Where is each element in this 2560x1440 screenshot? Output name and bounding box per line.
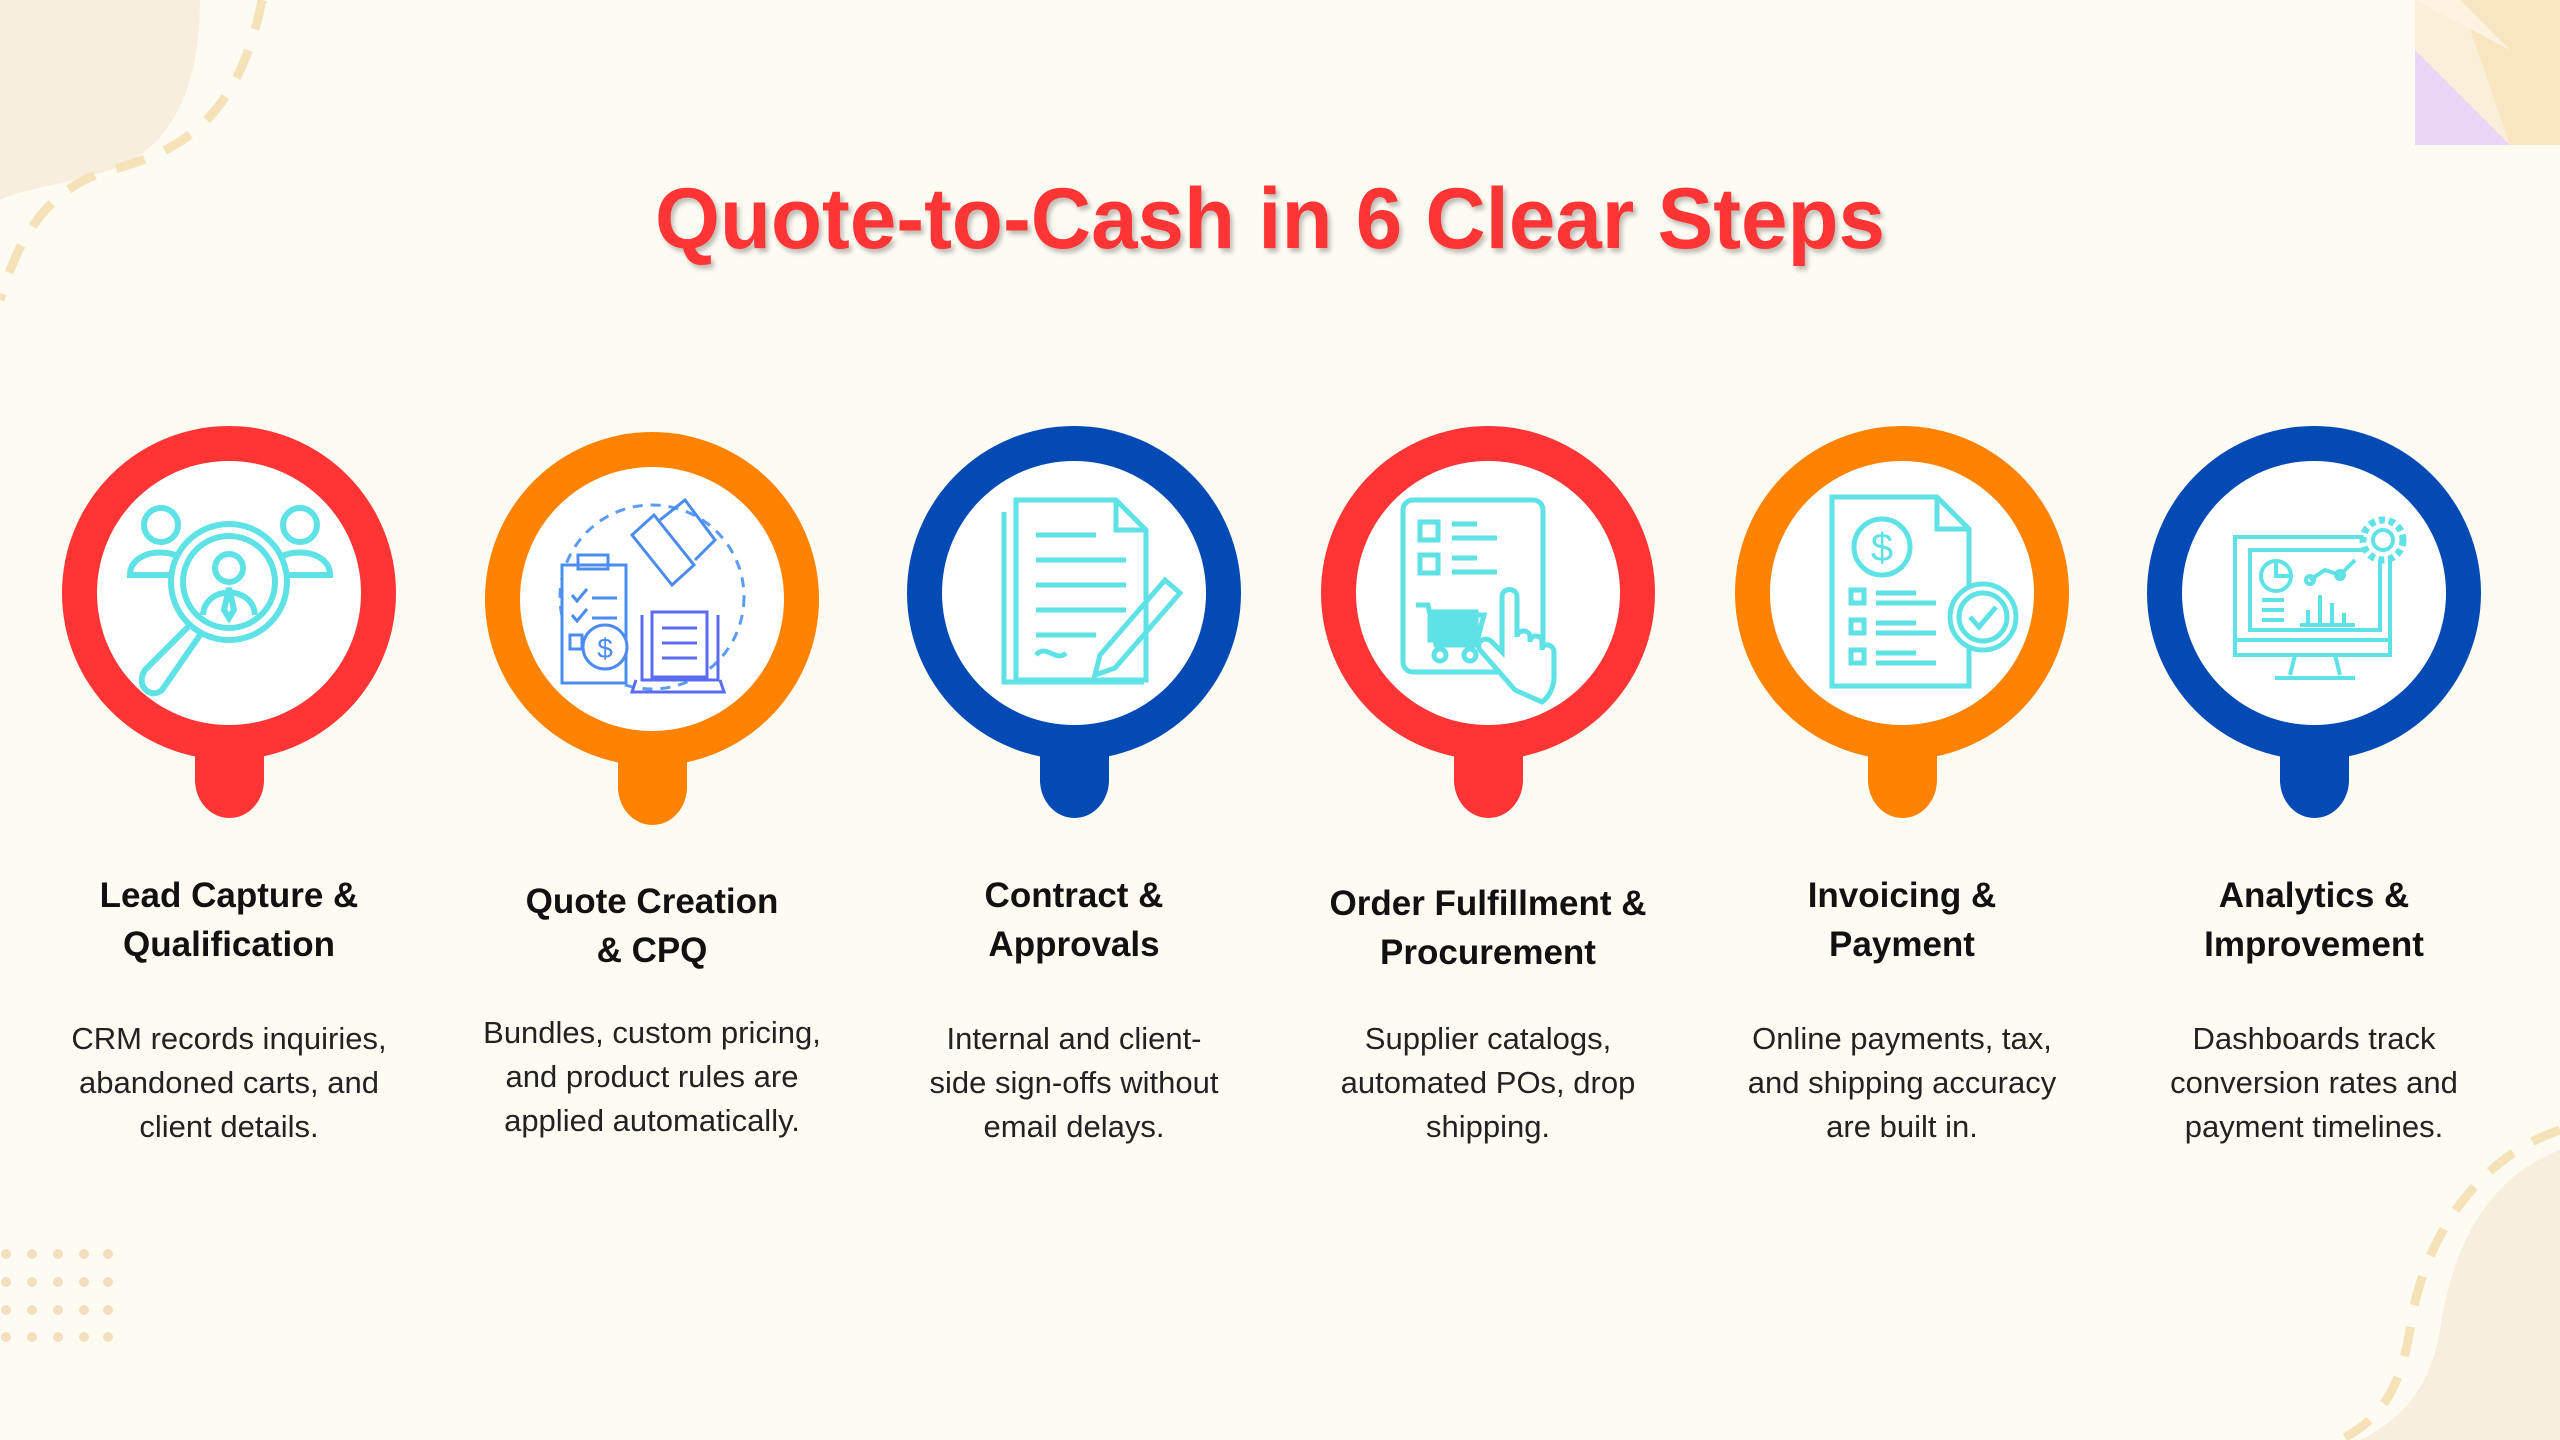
text 3: side sign-offs without xyxy=(930,1065,1219,1100)
step 4: Order Fulfillment xyxy=(1321,426,1655,1144)
heading 2: Quote Creation xyxy=(526,882,778,921)
decoration: top-left blob xyxy=(0,0,262,300)
text 6: payment timelines. xyxy=(2185,1109,2443,1144)
text 1: abandoned carts, and xyxy=(79,1065,379,1100)
text 2: and product rules are xyxy=(506,1059,798,1094)
step 2: Quote Creation xyxy=(483,432,821,1138)
heading 2: & CPQ xyxy=(597,931,707,970)
decoration: bottom-right blob xyxy=(2340,1130,2560,1440)
heading 3: Contract & xyxy=(985,876,1163,915)
icon: handshake quote xyxy=(560,500,744,692)
heading 1: Qualification xyxy=(123,925,335,964)
text 1: CRM records inquiries, xyxy=(71,1021,387,1056)
icon: invoice: $ xyxy=(1871,526,1893,570)
step 6: Analytics xyxy=(2147,426,2481,1144)
icon: contract xyxy=(1004,500,1180,682)
icon: magnifier people xyxy=(130,508,330,693)
heading 3: Approvals xyxy=(988,925,1160,964)
heading 5: Payment xyxy=(1829,925,1975,964)
step 3: Contract xyxy=(907,426,1241,1144)
marker 1 xyxy=(62,426,396,818)
text 6: Dashboards track xyxy=(2193,1021,2436,1056)
heading 4: Order Fulfillment & xyxy=(1330,884,1646,923)
text 5: Online payments, tax, xyxy=(1752,1021,2052,1056)
icon: dashboard monitor xyxy=(2235,520,2403,678)
heading 6: Improvement xyxy=(2204,925,2424,964)
text 6: conversion rates and xyxy=(2170,1065,2458,1100)
marker 4 xyxy=(1321,426,1655,818)
step 5: Invoicing xyxy=(1735,426,2069,1144)
text 3: email delays. xyxy=(984,1109,1164,1144)
marker 6 xyxy=(2147,426,2481,818)
text 4: shipping. xyxy=(1426,1109,1550,1144)
text 2: Bundles, custom pricing, xyxy=(483,1015,821,1050)
text 5: are built in. xyxy=(1826,1109,1978,1144)
step 1: Lead Capture xyxy=(62,426,396,1144)
icon: handshake quote: $ xyxy=(597,633,613,664)
heading 4: Procurement xyxy=(1380,933,1596,972)
heading 5: Invoicing & xyxy=(1808,876,1996,915)
text 5: and shipping accuracy xyxy=(1748,1065,2057,1100)
marker 3 xyxy=(907,426,1241,818)
decoration: dot grid xyxy=(1,1249,113,1342)
text 4: automated POs, drop xyxy=(1341,1065,1635,1100)
marker 2 xyxy=(485,432,819,825)
text 1: client details. xyxy=(139,1109,319,1144)
title: Quote-to-Cash in 6 Clear Steps xyxy=(655,171,1885,267)
marker 5 xyxy=(1735,426,2069,818)
heading 6: Analytics & xyxy=(2219,876,2409,915)
text 2: applied automatically. xyxy=(504,1103,800,1138)
icon: cart checklist xyxy=(1403,500,1554,702)
text 3: Internal and client- xyxy=(946,1021,1202,1056)
heading 1: Lead Capture & xyxy=(100,876,358,915)
icon: invoice xyxy=(1832,497,2016,686)
text 4: Supplier catalogs, xyxy=(1365,1021,1611,1056)
decoration: top-right triangles xyxy=(2415,0,2560,145)
